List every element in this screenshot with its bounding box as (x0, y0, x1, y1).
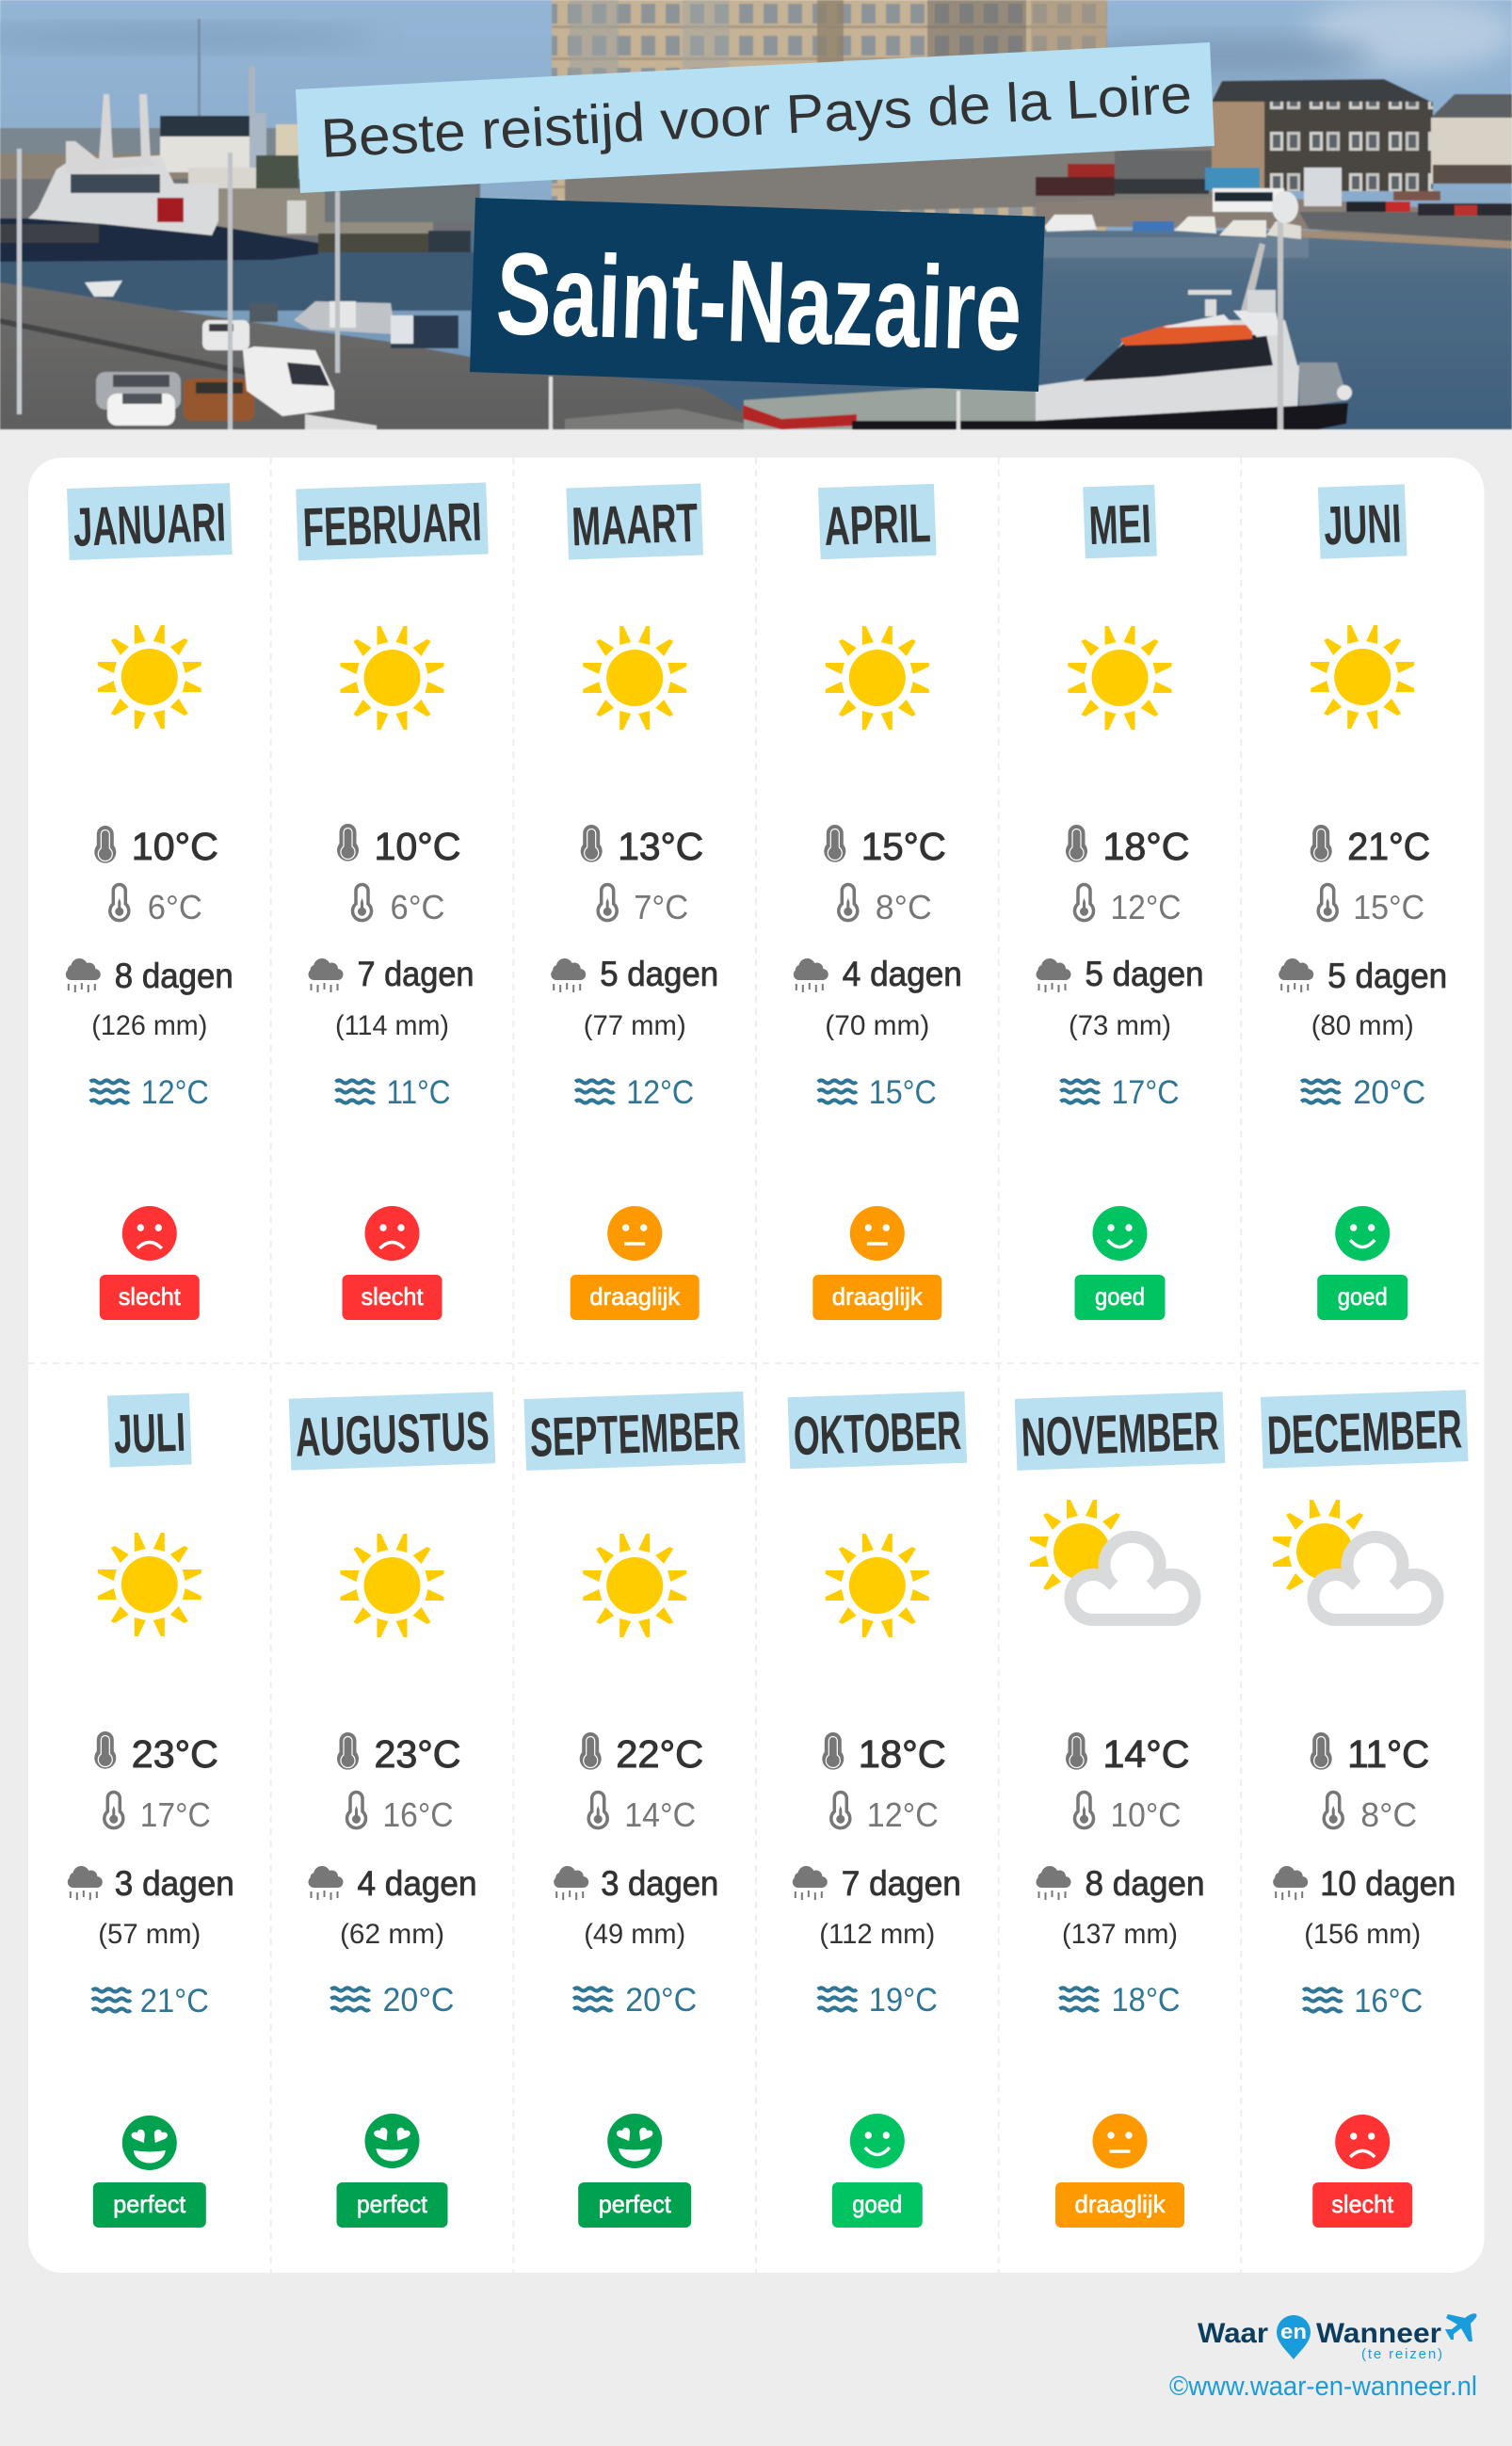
icon: thermometer high (337, 1732, 359, 1770)
rating badge (1075, 1275, 1166, 1320)
rainfall: (70 mm) (825, 1010, 929, 1041)
max temperature: 18°C (859, 1732, 946, 1776)
icon: thermometer high (580, 1732, 602, 1770)
water temperature: 17°C (1111, 1074, 1179, 1111)
water temperature: 12°C (141, 1074, 209, 1111)
icon: sun (98, 1533, 201, 1636)
icon: water (1301, 1081, 1340, 1103)
icon: sun (583, 626, 686, 730)
icon: thermometer high (1066, 825, 1087, 862)
min temperature: 8°C (1360, 1795, 1417, 1834)
rainfall: (73 mm) (1069, 1010, 1171, 1041)
icon: rain (1279, 958, 1313, 992)
logo: Waar en Wanneer: en (1280, 2320, 1307, 2343)
rating badge: goed (1338, 1282, 1388, 1311)
month: juni (1279, 484, 1447, 1320)
logo: Waar en Wanneer (1198, 2313, 1477, 2362)
month heading: JULI (113, 1402, 186, 1465)
rating badge: draaglijk (589, 1282, 681, 1311)
rating badge (578, 2182, 691, 2228)
icon: neutral face (850, 1206, 905, 1261)
icon: rain (1273, 1866, 1308, 1900)
month heading: JUNI (1323, 493, 1402, 556)
icon: thermometer low (105, 1793, 123, 1828)
rating badge (343, 1275, 442, 1320)
icon: rain (1036, 1866, 1071, 1900)
rain days: 4 dagen (843, 955, 962, 993)
month heading (818, 484, 937, 559)
icon: water (335, 1081, 375, 1103)
icon: rain (66, 958, 101, 992)
month heading: JANUARI (72, 491, 227, 558)
month: juli (68, 1393, 234, 2228)
rainfall: (62 mm) (340, 1919, 444, 1950)
header photo: harbour of Saint-Nazaire (0, 0, 1512, 429)
rating badge (832, 2182, 923, 2228)
month: november (1015, 1392, 1225, 2228)
water temperature: 20°C (625, 1982, 697, 2019)
max temperature: 15°C (861, 825, 946, 868)
icon: sun (98, 625, 201, 729)
water temperature: 21°C (140, 1983, 209, 2020)
title banner: Saint-Nazaire: Saint-Nazaire (494, 229, 1023, 376)
icon: water (92, 1988, 131, 2011)
min temperature: 6°C (390, 888, 444, 926)
icon: thermometer high (337, 824, 359, 861)
rainfall: (114 mm) (335, 1010, 449, 1041)
min temperature: 16°C (382, 1795, 454, 1834)
icon: thermometer low (598, 885, 617, 921)
icon: sad face (122, 1206, 177, 1261)
month: september (523, 1392, 746, 2228)
icon: water (1060, 1081, 1100, 1103)
icon: thermometer high (824, 825, 845, 862)
rain days: 3 dagen (601, 1864, 718, 1903)
rating badge (1055, 2182, 1184, 2228)
month heading: OKTOBER (793, 1400, 962, 1467)
icon: sun behind cloud (1030, 1500, 1195, 1619)
rain days: 5 dagen (600, 955, 718, 993)
month heading (523, 1392, 746, 1471)
rainfall: (137 mm) (1062, 1919, 1178, 1950)
icon: thermometer low (1075, 1793, 1094, 1828)
icon: rain (309, 1866, 343, 1900)
month: januari (66, 483, 233, 1320)
rating badge (93, 2182, 206, 2228)
min temperature: 15°C (1353, 888, 1424, 926)
month heading: MEI (1088, 493, 1152, 556)
icon: map pin (1277, 2315, 1311, 2359)
icon: love face (607, 2114, 662, 2168)
month: december (1261, 1390, 1468, 2228)
icon: sad face (365, 1206, 420, 1261)
icon: rain (1036, 958, 1071, 992)
icon: sun (1068, 626, 1171, 730)
rating badge: perfect (357, 2190, 428, 2218)
min temperature: 7°C (634, 888, 688, 926)
rainfall: (156 mm) (1304, 1919, 1421, 1950)
rain days: 5 dagen (1327, 957, 1447, 995)
rating badge (1317, 1275, 1407, 1320)
rating badge (571, 1275, 700, 1320)
min temperature: 17°C (140, 1795, 211, 1834)
icon: rain (794, 958, 828, 992)
rating badge: goed (852, 2190, 902, 2218)
rating badge: draaglijk (1075, 2190, 1166, 2218)
logo: Waar en Wanneer: Wanneer (1316, 2318, 1441, 2349)
icon: neutral face (607, 1206, 662, 1261)
icon: thermometer high (1066, 1732, 1087, 1770)
min temperature: 12°C (867, 1795, 939, 1834)
rating badge: goed (1095, 1282, 1145, 1311)
rainfall: (57 mm) (98, 1919, 201, 1950)
max temperature: 23°C (132, 1732, 218, 1776)
month heading: NOVEMBER (1021, 1400, 1220, 1469)
icon: sun (583, 1534, 686, 1637)
icon: thermometer low (839, 885, 858, 921)
rainfall: (126 mm) (91, 1010, 207, 1041)
min temperature: 10°C (1111, 1795, 1181, 1834)
icon: neutral face (1092, 2114, 1147, 2168)
month heading (788, 1392, 967, 1469)
icon: water (573, 1988, 612, 2011)
title banner: Saint-Nazaire (470, 198, 1045, 392)
min temperature: 12°C (1111, 888, 1181, 926)
rain days: 10 dagen (1320, 1864, 1456, 1903)
rain days: 5 dagen (1085, 955, 1203, 993)
month: april (794, 484, 962, 1320)
month heading (296, 482, 489, 561)
icon: water (818, 1081, 857, 1103)
icon: thermometer low (588, 1793, 607, 1828)
rain days: 3 dagen (115, 1864, 234, 1903)
rain days: 4 dagen (358, 1864, 476, 1903)
icon: sun (341, 1534, 444, 1637)
icon: water (1060, 1988, 1098, 2011)
icon: rain (554, 1866, 588, 1900)
icon: rain (793, 1866, 828, 1900)
icon: sad face (1335, 2115, 1390, 2169)
rating badge: perfect (599, 2190, 671, 2218)
month heading: APRIL (823, 492, 932, 557)
title banner: Beste reistijd voor Pays de la Loire: Beste reistijd voor Pays de la Loire (319, 63, 1193, 169)
icon: water (90, 1081, 129, 1103)
icon: thermometer low (352, 885, 371, 921)
month heading (1015, 1392, 1225, 1471)
max temperature: 11°C (1347, 1732, 1429, 1776)
icon: thermometer low (346, 1793, 365, 1828)
icon: thermometer high (94, 1731, 116, 1769)
icon: sun (341, 626, 444, 730)
max temperature: 10°C (375, 825, 461, 868)
month: februari (296, 482, 489, 1320)
water temperature: 12°C (626, 1074, 694, 1111)
month heading (107, 1393, 192, 1467)
water temperature: 20°C (1353, 1074, 1425, 1111)
rain days: 7 dagen (358, 955, 475, 993)
icon: sun (826, 1534, 929, 1637)
logo: Waar en Wanneer: Waar (1198, 2318, 1268, 2349)
logo: Waar en Wanneer: (te reizen) (1361, 2346, 1442, 2362)
max temperature: 21°C (1347, 825, 1430, 868)
panel: climate table card (28, 458, 1484, 2273)
rainfall: (77 mm) (584, 1010, 686, 1041)
title banner: Beste reistijd voor Pays de la Loire (296, 42, 1214, 193)
icon: thermometer high (1311, 1732, 1332, 1770)
icon: sun (826, 626, 929, 730)
icon: thermometer high (822, 1732, 844, 1770)
icon: plane (1445, 2313, 1477, 2341)
month heading (67, 483, 233, 560)
month heading: AUGUSTUS (295, 1400, 491, 1469)
max temperature: 22°C (616, 1732, 703, 1776)
month heading (1083, 485, 1157, 558)
icon: water (331, 1988, 369, 2011)
water temperature: 11°C (386, 1074, 450, 1111)
rainfall: (112 mm) (819, 1919, 935, 1950)
max temperature: 23°C (375, 1732, 461, 1776)
rain days: 8 dagen (115, 957, 233, 995)
min temperature: 6°C (148, 888, 202, 926)
icon: thermometer low (1324, 1793, 1343, 1828)
water temperature: 15°C (869, 1074, 937, 1111)
rating badge: slecht (362, 1282, 424, 1311)
icon: thermometer low (1318, 885, 1337, 921)
min temperature: 8°C (876, 888, 932, 926)
max temperature: 13°C (618, 825, 703, 868)
icon: love face (122, 2116, 177, 2170)
month: mei (1036, 485, 1203, 1320)
icon: love face (365, 2114, 420, 2168)
icon: happy face (1092, 1206, 1147, 1261)
icon: water (818, 1988, 857, 2011)
rating badge (1312, 2182, 1412, 2228)
icon: thermometer low (110, 885, 129, 921)
month heading (289, 1392, 495, 1471)
icon: happy face (1335, 1206, 1390, 1261)
website url: ©www.waar-en-wanneer.nl (1169, 2372, 1477, 2402)
icon: water (575, 1081, 614, 1103)
rating badge: slecht (1331, 2190, 1394, 2218)
icon: rain (309, 958, 343, 992)
month heading (566, 484, 703, 559)
water temperature: 18°C (1111, 1982, 1181, 2019)
icon: water (1303, 1988, 1342, 2011)
month heading: SEPTEMBER (529, 1400, 741, 1469)
rating badge (337, 2182, 448, 2228)
max temperature: 18°C (1103, 825, 1190, 868)
rating badge: perfect (113, 2190, 186, 2218)
rating badge: draaglijk (832, 1282, 924, 1311)
icon: thermometer high (581, 825, 603, 862)
month heading: MAART (571, 492, 699, 557)
month: oktober (788, 1392, 967, 2228)
month: maart (551, 484, 718, 1320)
water temperature: 20°C (382, 1982, 454, 2019)
icon: thermometer low (831, 1793, 850, 1828)
rain days: 8 dagen (1085, 1864, 1205, 1903)
rain days: 7 dagen (842, 1864, 961, 1903)
icon: thermometer low (1075, 885, 1094, 921)
month: augustus (289, 1392, 495, 2228)
icon: thermometer high (94, 826, 116, 863)
rating badge: slecht (119, 1282, 182, 1311)
month heading (1318, 484, 1407, 559)
icon: rain (68, 1866, 103, 1900)
water temperature: 19°C (869, 1982, 938, 2019)
rainfall: (49 mm) (584, 1919, 685, 1950)
max temperature: 10°C (132, 825, 218, 868)
min temperature: 14°C (624, 1795, 696, 1834)
rating badge (100, 1275, 200, 1320)
icon: thermometer high (1311, 825, 1332, 862)
icon: happy face (850, 2114, 905, 2168)
icon: sun (1311, 625, 1414, 729)
rating badge (812, 1275, 941, 1320)
month heading: FEBRUARI (302, 491, 483, 558)
water temperature: 16°C (1354, 1983, 1423, 2020)
rainfall: (80 mm) (1311, 1010, 1414, 1041)
icon: rain (551, 958, 586, 992)
icon: sun behind cloud (1273, 1500, 1438, 1619)
max temperature: 14°C (1103, 1732, 1190, 1776)
